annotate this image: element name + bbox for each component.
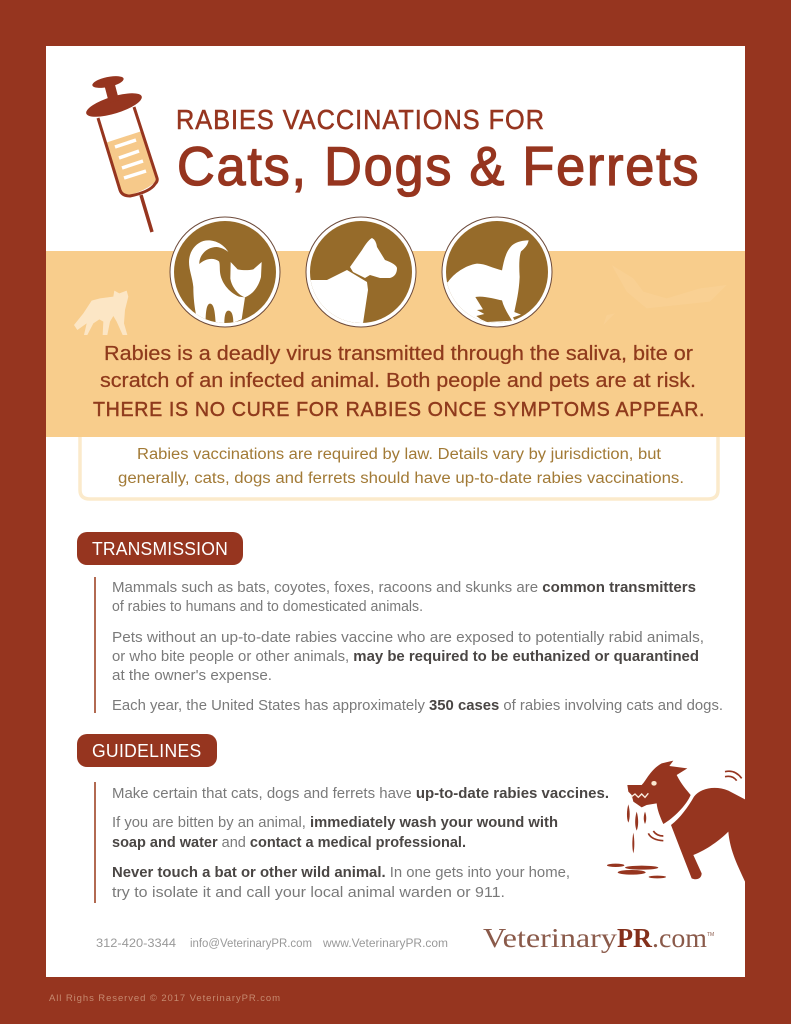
title: Cats, Dogs & Ferrets — [177, 136, 699, 197]
logo — [483, 923, 714, 953]
logo: PR — [617, 923, 652, 953]
warning text: Rabies is a deadly virus transmitted through the saliva, bite or — [104, 343, 693, 365]
footer contact: info@VeterinaryPR.com — [190, 938, 312, 950]
icon: dog — [300, 217, 416, 330]
guidelines text: try to isolate it and call your local animal warden or 911. — [112, 885, 505, 901]
heading: guidelines: GUIDELINES — [92, 741, 201, 761]
transmission text: at the owner's expense. — [112, 668, 272, 684]
transmission text: Mammals such as bats, coyotes, foxes, racoons and skunks are common transmitters — [112, 580, 696, 596]
heading: transmission: TRANSMISSION — [92, 539, 228, 559]
icon: faint bat — [603, 265, 727, 325]
icon: rabid dog — [607, 761, 745, 882]
law note box: generally, cats, dogs and ferrets should have up-to-date rabies vaccinations. — [118, 470, 684, 487]
orange band — [46, 251, 745, 437]
guidelines text: Make certain that cats, dogs and ferrets have up-to-date rabies vaccines. — [112, 786, 609, 802]
logo: Veterinary — [483, 923, 618, 953]
copyright: All Righs Reserved © 2017 VeterinaryPR.com — [49, 993, 280, 1004]
warning text: THERE IS NO CURE FOR RABIES ONCE SYMPTOMS APPEAR. — [93, 399, 705, 421]
transmission text: Each year, the United States has approximately 350 cases of rabies involving cats and dogs. — [112, 698, 723, 714]
title: RABIES VACCINATIONS FOR — [176, 104, 544, 135]
title — [176, 104, 699, 197]
transmission text: or who bite people or other animals, may be required to be euthanized or quarantined — [112, 649, 699, 665]
transmission text: of rabies to humans and to domesticated animals. — [112, 599, 423, 615]
transmission text: Pets without an up-to-date rabies vaccine who are exposed to potentially rabid animals, — [112, 630, 704, 646]
law note box — [80, 437, 718, 499]
guidelines text: soap and water and contact a medical professional. — [112, 835, 466, 851]
guidelines text: If you are bitten by an animal, immediately wash your wound with — [112, 815, 558, 831]
warning text: scratch of an infected animal. Both people and pets are at risk. — [100, 370, 696, 392]
icon: cat — [170, 217, 280, 327]
logo: TM — [707, 932, 714, 938]
law note box: Rabies vaccinations are required by law. Details vary by jurisdiction, but — [137, 446, 662, 463]
footer contact: 312-420-3344 — [96, 938, 177, 950]
guidelines text: Never touch a bat or other wild animal. In one gets into your home, — [112, 865, 570, 881]
heading: guidelines — [77, 734, 217, 767]
guidelines text — [94, 782, 609, 903]
transmission text — [94, 577, 723, 714]
heading: transmission — [77, 532, 243, 565]
warning text — [93, 343, 705, 421]
footer contact: www.VeterinaryPR.com — [322, 938, 448, 950]
icon: faint fox — [74, 291, 128, 335]
logo: .com — [652, 923, 707, 953]
icon: syringe — [84, 74, 157, 232]
footer contact — [96, 938, 448, 950]
icon: ferret — [442, 217, 552, 327]
